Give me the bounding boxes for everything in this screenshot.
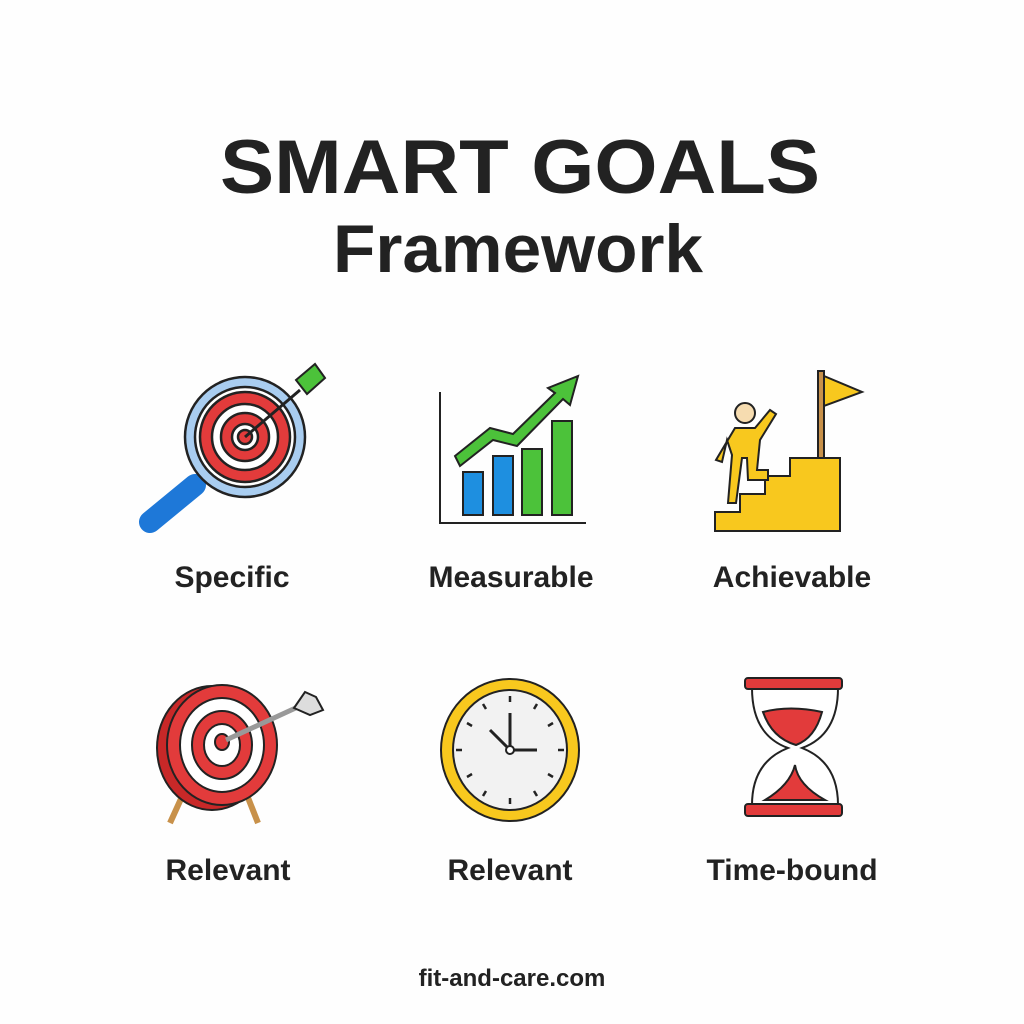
label: Relevant: Relevant [165, 854, 291, 887]
icon: hourglass [745, 678, 842, 816]
footer: fit-and-care.com [419, 965, 605, 992]
label: Relevant (middle): Relevant [447, 854, 573, 887]
label: Specific: Specific [174, 561, 290, 594]
label: Time-bound: Time-bound [706, 854, 878, 887]
label: Achievable: Achievable [713, 561, 871, 594]
label: Measurable: Measurable [428, 561, 594, 594]
icon: bar chart [440, 376, 586, 523]
subtitle: Framework [333, 211, 703, 287]
icon: archery target [157, 685, 323, 823]
icon: clock [441, 679, 579, 821]
title: SMART GOALS [220, 125, 820, 210]
icon: climbing stairs [715, 371, 862, 531]
icon: magnifier target [150, 364, 325, 522]
